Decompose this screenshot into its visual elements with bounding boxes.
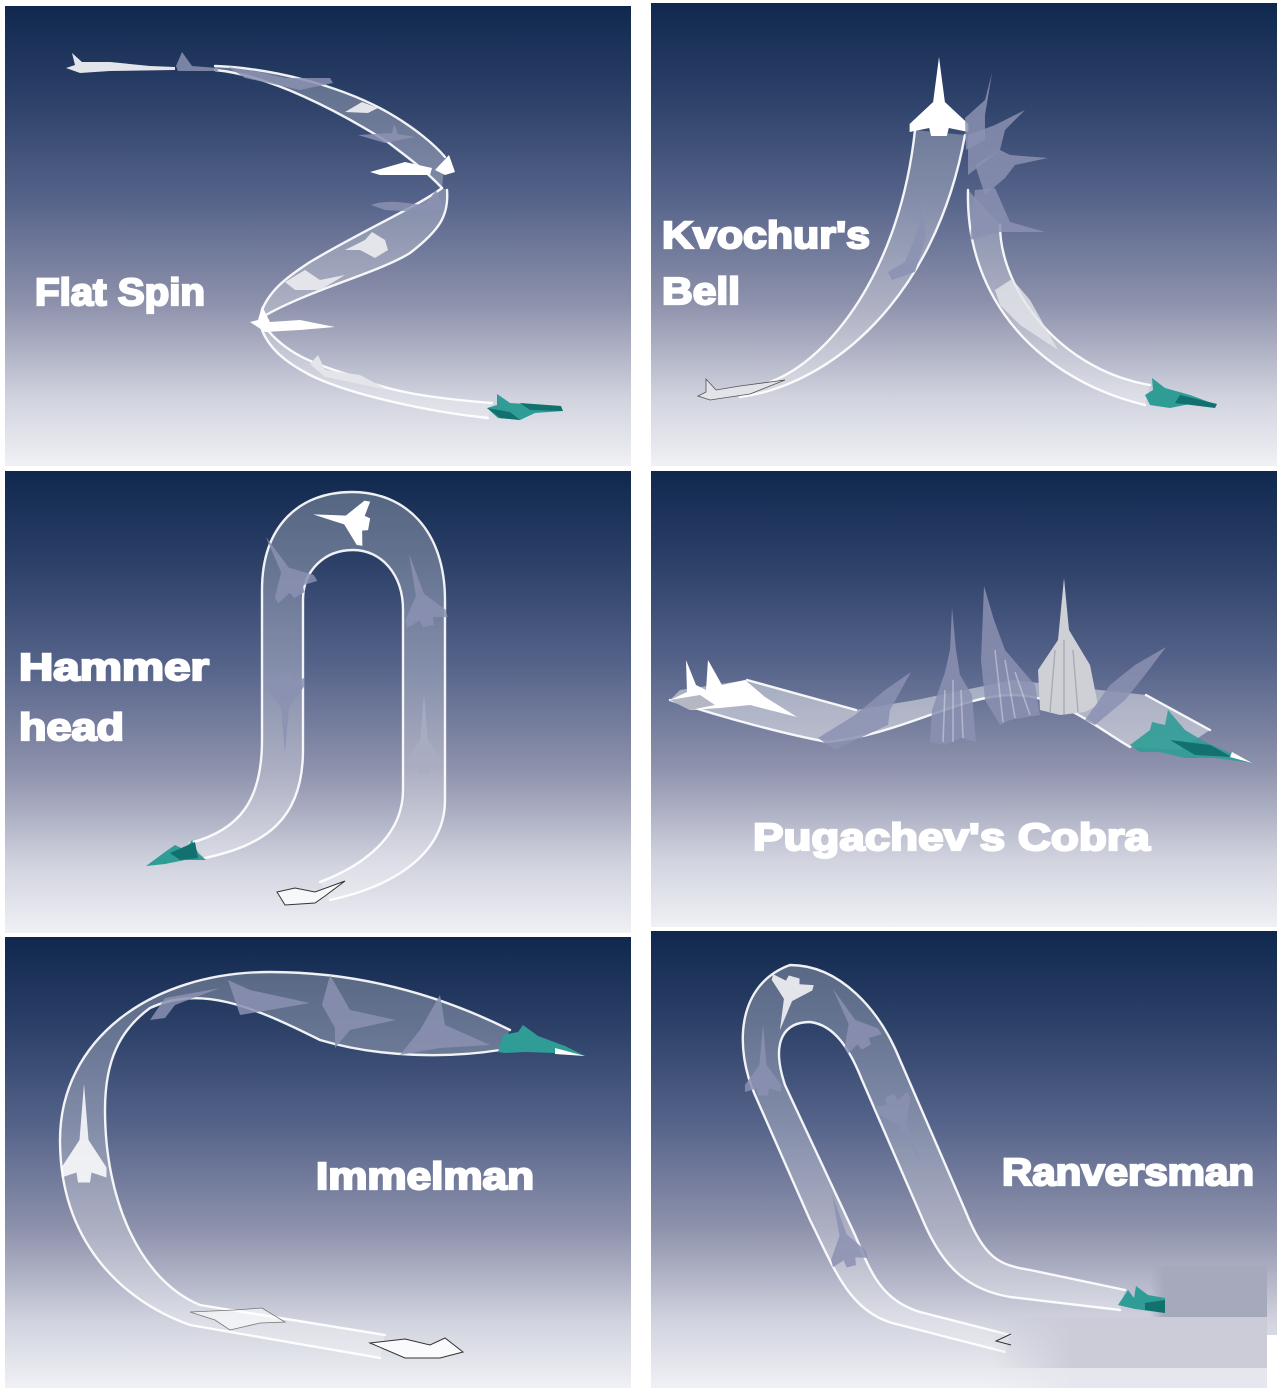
panel: Ranversman bbox=[651, 931, 1280, 1390]
panel: Pugachev's Cobra bbox=[651, 471, 1277, 927]
icon: jet sequence bbox=[246, 492, 449, 905]
icon: jet sequence bbox=[745, 972, 937, 1271]
label: Immelman: Immelman bbox=[316, 1156, 534, 1198]
label: Hammerhead: head bbox=[19, 707, 124, 749]
patch: erased corner bbox=[990, 1266, 1280, 1390]
icon: jet sequence bbox=[670, 578, 1166, 750]
label: Pugachev's Cobra: Pugachev's Cobra bbox=[753, 817, 1151, 859]
label: Ranversman: Ranversman bbox=[1002, 1152, 1254, 1194]
icon: teal jet bbox=[1145, 378, 1217, 408]
label: Kvochur's Bell: Kvochur's bbox=[662, 215, 870, 257]
flight ribbon bbox=[670, 680, 1210, 750]
icon: jet sequence bbox=[698, 57, 1058, 400]
flight ribbon bbox=[60, 972, 510, 1358]
flight ribbon bbox=[190, 492, 445, 900]
panel: Hammerhead bbox=[5, 471, 631, 933]
icon: teal jet bbox=[1130, 710, 1252, 763]
icon: jet nose bbox=[996, 1334, 1011, 1345]
icon: teal jet bbox=[1118, 1286, 1165, 1313]
icon: teal jet bbox=[146, 840, 206, 866]
label: Hammerhead: Hammer bbox=[19, 647, 209, 689]
label: Hammerhead bbox=[19, 647, 209, 749]
flight ribbon bbox=[740, 130, 1150, 405]
panel: Flat Spin bbox=[5, 6, 631, 466]
panel: Kvochur's Bell bbox=[651, 3, 1277, 466]
panel: Immelman bbox=[5, 937, 631, 1388]
icon: teal jet bbox=[487, 394, 563, 420]
label: Kvochur's Bell bbox=[662, 215, 870, 313]
flight ribbon bbox=[743, 965, 1125, 1352]
icon: teal jet bbox=[498, 1025, 585, 1056]
label: Kvochur's Bell: Bell bbox=[662, 271, 740, 313]
icon: jet sequence bbox=[66, 52, 455, 390]
label: Flat Spin: Flat Spin bbox=[35, 272, 205, 314]
icon: jet sequence bbox=[62, 975, 490, 1358]
flight ribbon bbox=[215, 66, 492, 418]
